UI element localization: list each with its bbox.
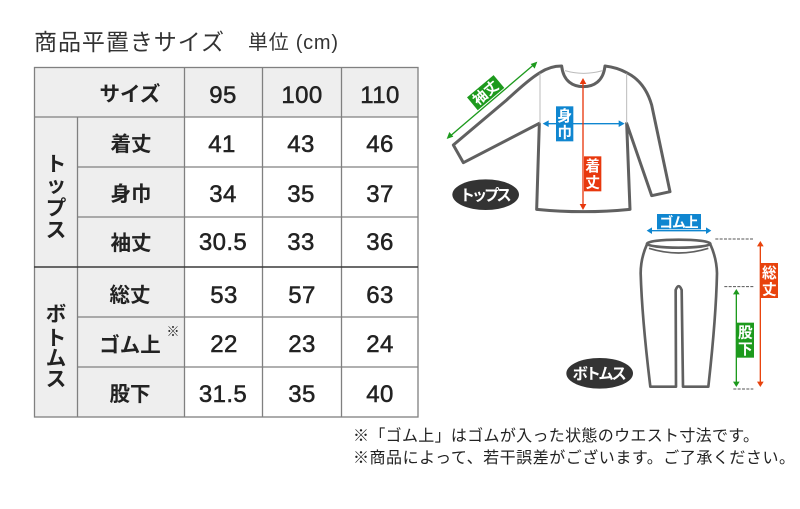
row: 着丈 (110, 127, 394, 158)
title: 商品平置きサイズ (34, 23, 224, 57)
section label: bottoms: ム (46, 341, 66, 371)
section label: bottoms: ス (46, 362, 66, 392)
arrow: body width: 巾 (557, 122, 572, 143)
arrow: total length (757, 241, 778, 387)
table header row: 95 (209, 82, 237, 109)
row: 着丈: 着丈 (110, 127, 152, 157)
row: 股下: 股下 (110, 377, 150, 407)
arrow: body length (580, 78, 601, 210)
table header row: 110 (360, 82, 400, 109)
arrow: body width (543, 105, 625, 143)
row: 総丈: 総丈 (110, 278, 150, 308)
section label: tops: プ (46, 191, 67, 221)
row: 袖丈: 袖丈 (110, 226, 152, 256)
table header row: 100 (281, 82, 323, 109)
row: 身巾: 37 (366, 181, 394, 208)
badge: bottoms (566, 358, 633, 389)
title (34, 23, 338, 57)
row: 総丈: 63 (366, 282, 394, 309)
footnotes: ※商品によって、若干誤差がございます。ご了承ください。 (353, 444, 795, 468)
bottoms diagram (566, 212, 778, 389)
row: ゴム上 (99, 321, 394, 358)
pants outline (641, 240, 717, 387)
section label: tops: ト (46, 147, 66, 177)
row: 股下 (110, 377, 394, 408)
shirt outline (453, 66, 670, 212)
arrow: body width: 身 (557, 105, 572, 126)
tops diagram (447, 62, 670, 212)
section label: tops (46, 147, 67, 243)
row: ゴム上: 23 (288, 331, 316, 358)
arrow: waist (647, 212, 711, 234)
guide lines (715, 239, 753, 389)
row: 総丈: 53 (210, 282, 238, 309)
row: 袖丈 (110, 226, 394, 256)
section label: bottoms: ト (46, 321, 66, 351)
row: 股下: 31.5 (199, 381, 247, 408)
table header row (100, 77, 400, 109)
arrow: waist: ゴム上 (659, 212, 699, 232)
row: 袖丈: 36 (366, 229, 394, 256)
row: 身巾: 身巾 (110, 177, 152, 207)
size table (34, 67, 418, 417)
row: 袖丈: 30.5 (199, 229, 247, 256)
row: 袖丈: 33 (287, 229, 315, 256)
arrow: sleeve length: 袖丈 (468, 75, 503, 110)
row: 股下: 35 (288, 381, 316, 408)
row: ゴム上: ゴム上 (99, 328, 161, 358)
row: 着丈: 41 (208, 131, 236, 158)
arrow: body length: 着 (585, 155, 600, 176)
section label: tops: ス (46, 213, 66, 243)
section label: bottoms (46, 297, 66, 392)
row: ゴム上: 22 (210, 331, 238, 358)
arrow: inseam (733, 289, 754, 387)
arrow: total length: 総 (762, 262, 777, 283)
section label: tops: ッ (46, 168, 66, 198)
row: 着丈: 43 (287, 131, 315, 158)
arrow: body length: 丈 (585, 172, 600, 193)
badge: tops: トップス (460, 183, 512, 205)
footnotes (353, 422, 795, 468)
row: 身巾 (110, 177, 394, 208)
row: 総丈: 57 (288, 282, 316, 309)
row: ゴム上: ※ (166, 321, 180, 340)
row: ゴム上: 24 (366, 331, 394, 358)
row: 身巾: 34 (209, 181, 237, 208)
badge: tops (452, 179, 519, 210)
arrow: inseam: 下 (738, 338, 753, 359)
footnotes: ※「ゴム上」はゴムが入った状態のウエスト寸法です。 (353, 422, 759, 446)
row: 着丈: 46 (366, 131, 394, 158)
row: 身巾: 35 (287, 181, 315, 208)
arrow: total length: 丈 (762, 278, 777, 299)
row: 総丈 (110, 278, 394, 309)
arrow: inseam: 股 (738, 322, 753, 343)
title: 単位 (cm) (248, 31, 338, 54)
row: 股下: 40 (366, 381, 394, 408)
badge: bottoms: ボトムス (573, 362, 627, 384)
arrow: sleeve length (447, 62, 537, 139)
table header row: サイズ (100, 77, 160, 107)
section label: bottoms: ボ (46, 297, 66, 327)
